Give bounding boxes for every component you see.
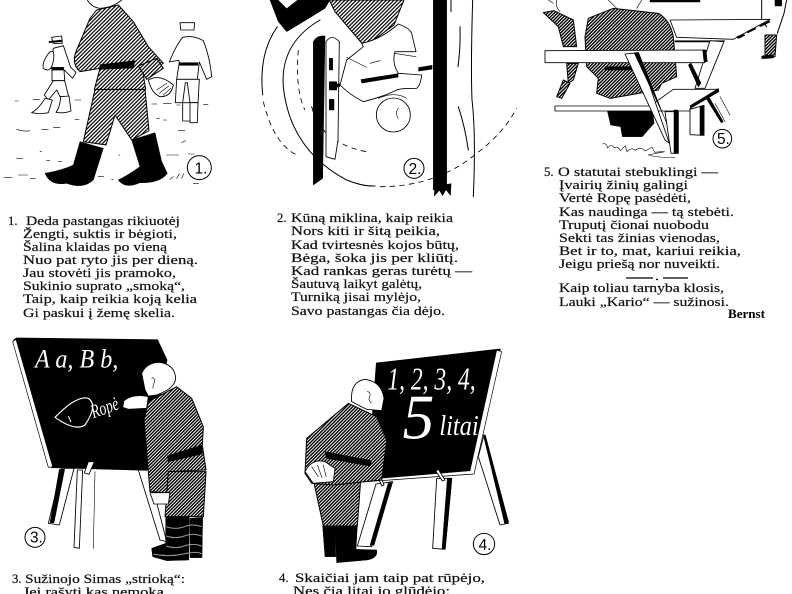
bald head	[351, 379, 384, 411]
author signature: Bernst	[728, 306, 766, 321]
blackboard	[14, 338, 167, 470]
drawing hand and forearm	[123, 396, 148, 409]
big swing arcs	[262, 20, 517, 187]
verse 4: 4.	[279, 571, 289, 585]
easel legs	[357, 435, 509, 549]
verse 1: Šalina klaidas po vieną	[23, 240, 167, 254]
verse 1: Žengti, suktis ir bėgioti,	[23, 227, 177, 241]
easel legs	[48, 468, 167, 548]
black left post	[313, 36, 325, 185]
illustration 5: soldier on the bench	[543, 0, 787, 158]
black boot, top left	[270, 0, 330, 32]
verse 5	[544, 165, 741, 309]
verse 4: Skaičiai jam taip pat rūpėjo,	[295, 571, 485, 585]
blackboard	[370, 349, 500, 477]
circled number 2: 2.	[409, 161, 421, 178]
clasped hands	[305, 461, 335, 483]
verse 2: Kad rankas geras turėtų —	[291, 264, 472, 278]
verse 2: Savo pastangas čia dėjo.	[291, 304, 445, 318]
ground marks	[4, 99, 208, 183]
verse 1: Nuo pat ryto jis per dieną.	[23, 253, 198, 267]
verse 2: Nors kiti ir šitą peikia,	[291, 224, 440, 238]
main soldier cuff and fist	[138, 58, 173, 97]
chalk 5 litai: 5	[403, 382, 434, 452]
circled number 5	[713, 129, 732, 148]
verse 2: Kad tvirtesnės kojos būtų,	[291, 238, 459, 252]
verse 1: 1.	[8, 214, 18, 228]
verse 1: Taip, kaip reikia koją kelia	[23, 292, 197, 306]
upside-down head	[376, 95, 410, 132]
seat board	[555, 88, 719, 111]
circled number 1	[187, 156, 211, 180]
main soldier tunic	[74, 5, 163, 89]
pull-up bar	[330, 65, 432, 89]
verse 1: Gi paskui į žemę skelia.	[23, 306, 175, 320]
verse 3: 3.	[12, 572, 22, 586]
portrait board edge	[650, 0, 700, 2]
background soldier, back view	[169, 23, 212, 123]
verse 5: Lauki „Kario“ — sužinosi.	[559, 295, 729, 309]
lower hand	[150, 493, 170, 504]
circled number 3	[25, 527, 45, 547]
verse 5: Jeigu priešą nor nuveikti.	[559, 257, 720, 271]
verse 1	[8, 214, 198, 320]
verse 3: Sužinojo Simas „strioką“:	[25, 572, 185, 586]
soldier belt	[167, 445, 202, 462]
verse 2: Kūną miklina, kaip reikia	[291, 211, 453, 225]
chalk clip	[84, 462, 94, 474]
chalk name Ropė: Ropė	[87, 394, 122, 423]
verse 5: Kaip toliau tarnyba klosis,	[559, 281, 724, 295]
table top	[670, 19, 770, 42]
standing figure at top right	[762, 0, 787, 59]
verse 3	[12, 572, 185, 594]
upside-down shirt and arms	[340, 24, 422, 102]
board white edge	[367, 350, 502, 482]
illustration 2: soldier on the pull-up bar	[262, 0, 517, 197]
soldier trousers	[165, 472, 206, 517]
boots	[323, 526, 377, 563]
main soldier head	[87, 0, 122, 8]
chalk numbers: 1, 2, 3, 4,	[387, 361, 476, 396]
verse 5: O statutai stebuklingi —	[558, 165, 718, 179]
illustration 1: marching soldier	[4, 0, 212, 186]
circled number 4: 4.	[479, 537, 491, 554]
soldier's belt	[605, 67, 635, 70]
neighbour on the left	[543, 0, 578, 98]
verse 2: Šautuvą laikyt galėtų,	[291, 277, 422, 291]
verse 5: Truputį čionai nuobodu	[559, 218, 710, 232]
illustration 4: soldier at the blackboard with numbers	[305, 349, 509, 563]
ornamental divider	[626, 278, 688, 280]
illustration 3: soldier writing at the blackboard	[13, 338, 206, 561]
chalk name Ropė	[55, 394, 122, 427]
verse 2	[277, 211, 472, 318]
upside-down torso, hatched	[329, 0, 404, 45]
verse 2: 2.	[277, 211, 287, 225]
boots	[152, 517, 203, 561]
bench back rail	[545, 50, 707, 63]
verse 1: Sukinio suprato „smoką“,	[23, 279, 185, 293]
trestle legs	[688, 41, 730, 123]
verse 5: Įvairių žinių galingi	[559, 178, 689, 192]
soldier belt	[325, 452, 372, 466]
soldier tunic	[305, 403, 387, 485]
verse 5: 5.	[544, 165, 554, 179]
verse 5: Bet ir to, mat, kariui reikia,	[559, 244, 741, 258]
circled number 4	[473, 533, 495, 555]
soldier trousers	[313, 480, 361, 526]
hatched back of the soldier	[585, 0, 677, 98]
verse 5: Kas naudinga — tą stebėti.	[559, 205, 734, 219]
artist signature	[603, 143, 675, 158]
near bench legs	[665, 105, 704, 153]
main soldier right boot	[118, 133, 167, 185]
circled number 5: 5.	[717, 131, 730, 148]
background soldier, side view	[32, 36, 76, 113]
verse 1: Jau stovėti jis pramoko,	[23, 266, 176, 280]
verse 1: Deda pastangas rikiuotėj	[26, 214, 180, 228]
boots under bench	[607, 107, 654, 137]
main soldier trousers	[83, 89, 149, 145]
soldier tunic	[144, 387, 206, 493]
chalk 5 litai	[403, 382, 479, 452]
bald head	[142, 362, 176, 396]
tree trunk	[433, 0, 474, 197]
verse 5: Vertė Ropę pasėdėti,	[559, 191, 691, 205]
verse 2: Turniką jisai mylėjo,	[291, 290, 421, 304]
verse 2: Bėga, šoka jis per kliūtį.	[291, 251, 458, 265]
circled number 1: 1.	[195, 160, 207, 177]
clips	[377, 469, 445, 486]
chalk 5 litai: litai	[439, 411, 479, 442]
main soldier left boot	[45, 142, 103, 186]
verse 4	[279, 571, 485, 594]
diagonal support	[625, 53, 669, 143]
main soldier belt	[100, 61, 135, 69]
chalk letters: A a, B b,	[33, 343, 118, 373]
circled number 3: 3.	[30, 530, 43, 547]
verse 5: Sekti tas žinias vienodas,	[559, 231, 720, 245]
circled number 2	[404, 158, 424, 178]
board white edge	[13, 339, 53, 467]
white left post	[326, 37, 339, 159]
